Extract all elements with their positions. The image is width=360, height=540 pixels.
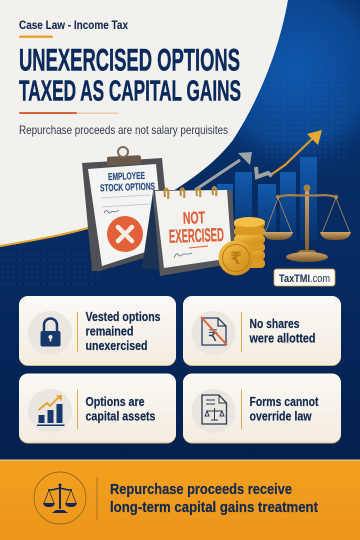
scales of justice: [263, 184, 351, 262]
card: no shares: were allotted: [249, 330, 316, 346]
calendar text: NOT: [183, 208, 206, 228]
clipboard heading: EMPLOYEE: [108, 171, 145, 183]
title: [19, 42, 241, 108]
subtitle: Repurchase proceeds are not salary perquisites: [19, 123, 228, 137]
desk calendar: not exercised: [142, 187, 236, 276]
footer banner: Repurchase proceeds receive: [110, 481, 292, 498]
brand badge: TaxTMI.com: [279, 273, 330, 285]
calendar text: [169, 208, 224, 248]
card: capital assets: [19, 374, 176, 444]
card: no shares: No shares: [250, 316, 300, 331]
clipboard heading: [100, 171, 155, 194]
kicker: Case Law - Income Tax: [19, 20, 129, 32]
icon: scales in circle: [34, 472, 86, 524]
icon: struck rupee document: ₹: [208, 328, 218, 345]
card: forms cannot override law: [183, 374, 341, 444]
icon: red x badge: [107, 216, 143, 252]
card: capital assets: Options are: [86, 394, 144, 409]
card: capital assets: capital assets: [86, 408, 156, 424]
brand badge: [274, 269, 335, 286]
card: no shares: [183, 296, 341, 366]
icon: rupee coin: [218, 240, 254, 276]
title rule: [19, 112, 119, 114]
icon: padlock: [40, 318, 60, 346]
card: vested options: Vested options: [86, 309, 160, 324]
gold curve accent: [0, 226, 95, 246]
footer banner: [0, 460, 360, 540]
icon: rupee coin: ₹: [230, 249, 242, 268]
kicker underline: [19, 36, 53, 38]
clipboard heading: STOCK OPTIONS: [100, 181, 155, 194]
clipboard: employee stock options: [82, 147, 171, 271]
coin stack: [234, 217, 265, 268]
bar chart with rising arrow: [195, 130, 322, 240]
card: vested options: unexercised: [86, 338, 148, 353]
icon: legal document: [202, 395, 226, 424]
icon: struck rupee document: [201, 317, 227, 345]
card: vested options: remained: [86, 324, 134, 338]
card: forms cannot override law: override law: [250, 408, 312, 424]
card: forms cannot override law: Forms cannot: [250, 394, 319, 409]
footer banner: long-term capital gains treatment: [110, 499, 318, 516]
calendar text: EXERCISED: [169, 225, 224, 248]
header panel: [0, 0, 288, 247]
card: vested options: [19, 296, 176, 366]
icon: growth chart: [37, 395, 64, 426]
